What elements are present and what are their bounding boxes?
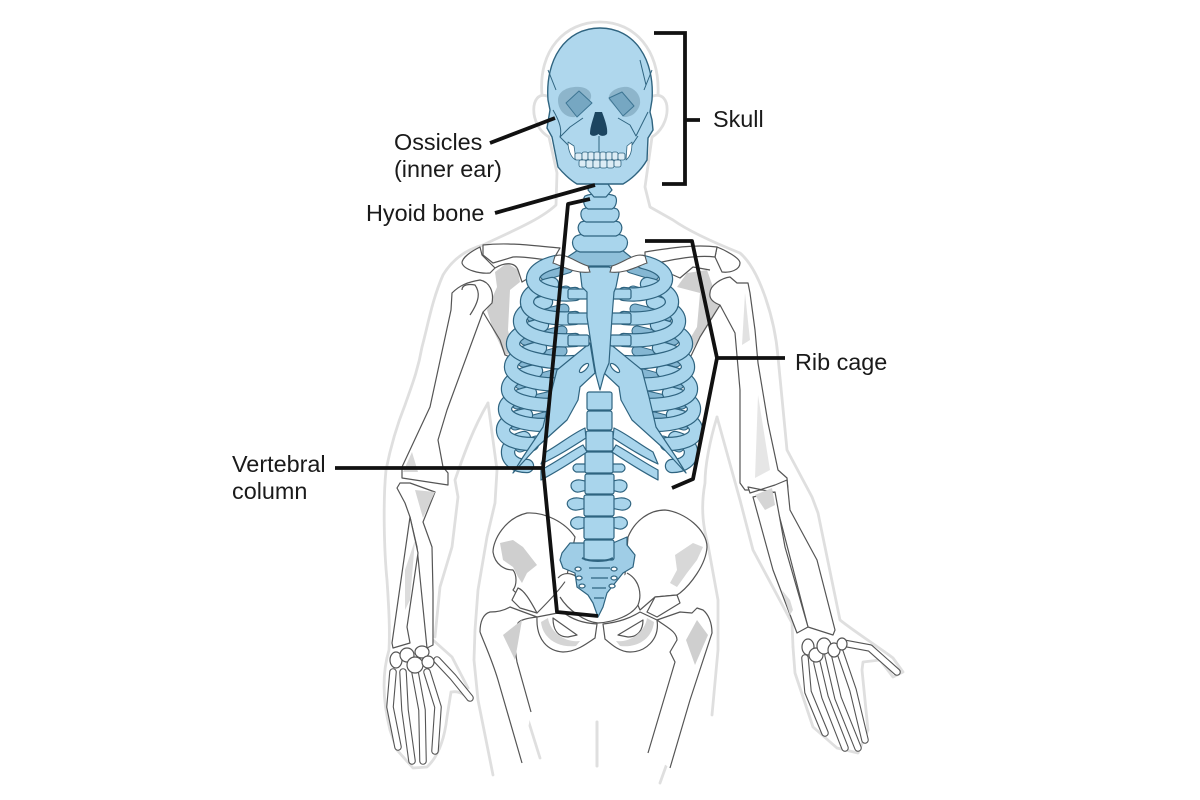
left acromion: [462, 247, 495, 273]
ischium pieces: [512, 588, 537, 613]
label: rib cage: Rib cage: [795, 349, 887, 375]
lumbar processes: [567, 464, 631, 529]
body outline: [384, 22, 903, 783]
skull: [547, 28, 653, 184]
label: ossicles: (inner ear): [394, 156, 502, 182]
vertebral column: [560, 184, 635, 617]
bracket: rib cage: [645, 241, 785, 488]
right ilium: [625, 510, 707, 610]
inner right arm and torso: [703, 417, 718, 715]
nose: [590, 112, 607, 136]
costal cartilage: [513, 289, 686, 480]
label: vertebral column: Vertebral: [232, 451, 326, 477]
left clavicle: [483, 244, 560, 263]
pubic arch: [537, 612, 597, 652]
neck vertebrae: [566, 184, 632, 266]
spine bodies: [587, 392, 612, 410]
sternum: [580, 267, 619, 390]
pelvis and femurs: [480, 510, 712, 768]
head halo: [542, 22, 658, 95]
jaw gaps: [568, 142, 632, 160]
label: vertebral column: column: [232, 478, 307, 504]
bracket: skull: [654, 33, 700, 184]
left humerus: [392, 280, 492, 648]
back ribs: [515, 268, 684, 447]
right humerus and forearm: [710, 277, 835, 635]
left forearm: [397, 483, 435, 648]
leader: ossicles: [490, 118, 555, 143]
left ilium: [493, 513, 575, 613]
eye sockets: [558, 87, 640, 117]
right hand: [802, 638, 897, 748]
right clavicle: [645, 246, 717, 262]
right femur: [648, 608, 712, 768]
label: ossicles: Ossicles: [394, 129, 482, 155]
left hand: [390, 646, 470, 761]
rib cage: [503, 262, 696, 480]
inner left arm and torso: [433, 640, 468, 700]
left femur: [480, 607, 537, 763]
label: skull: Skull: [713, 106, 764, 132]
leader: hyoid bone: [495, 185, 595, 213]
clavicle overlay: [553, 255, 647, 272]
bracket: vertebral column: [335, 199, 598, 616]
cheek lines: [548, 60, 652, 152]
scapulae and shoulder girdle: [462, 244, 740, 358]
legs: [510, 662, 540, 758]
pelvic inlet: [558, 573, 640, 623]
front ribs: [503, 262, 696, 466]
sacrum: [560, 537, 635, 617]
label: hyoid bone: Hyoid bone: [366, 200, 484, 226]
right acromion: [715, 247, 740, 272]
teeth: [575, 152, 625, 168]
